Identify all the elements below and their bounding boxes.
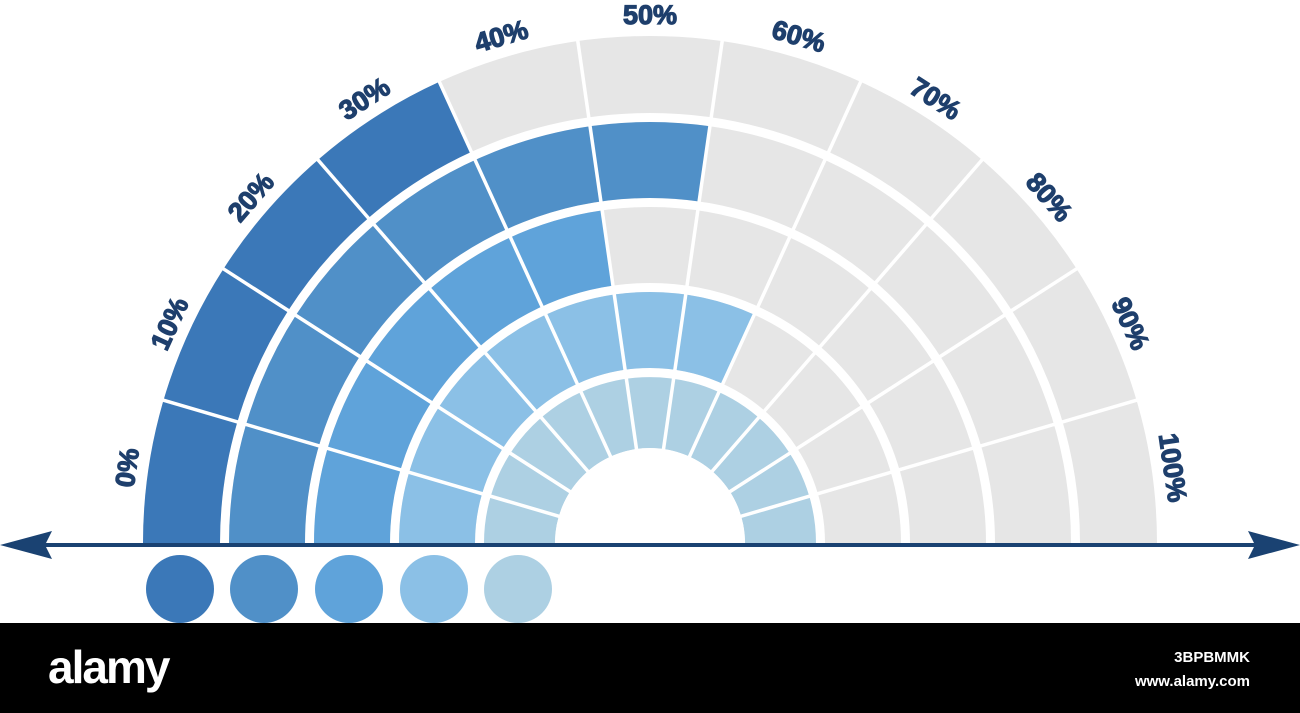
- footer bar: alamy: [48, 641, 171, 693]
- ring 3 (45%): [352, 245, 948, 543]
- semicircle chart: [159, 36, 1141, 543]
- percentage labels: [110, 0, 1192, 504]
- percentage labels: 50%: [623, 0, 677, 30]
- axis arrow: [0, 531, 1300, 559]
- footer bar: [0, 623, 1300, 713]
- percentage labels: 10%: [145, 293, 195, 354]
- percentage labels: 30%: [334, 72, 395, 126]
- percentage labels: 0%: [110, 446, 145, 489]
- percentage labels: 70%: [905, 72, 966, 126]
- footer bar: www.alamy.com: [1134, 673, 1250, 690]
- ring 4 (64%): [437, 330, 863, 543]
- ring 1 (40%): [182, 75, 1118, 543]
- legend circles: [146, 555, 552, 623]
- percentage labels: 90%: [1105, 293, 1155, 354]
- percentage labels: 60%: [769, 14, 829, 58]
- ring 5 (100%): [520, 413, 780, 543]
- footer bar: 3BPBMMK: [1174, 649, 1250, 666]
- percentage labels: 100%: [1153, 431, 1192, 504]
- percentage labels: 40%: [471, 14, 531, 58]
- ring 2 (55%): [267, 160, 1033, 543]
- percentage labels: 20%: [222, 167, 280, 227]
- percentage labels: 80%: [1020, 167, 1078, 227]
